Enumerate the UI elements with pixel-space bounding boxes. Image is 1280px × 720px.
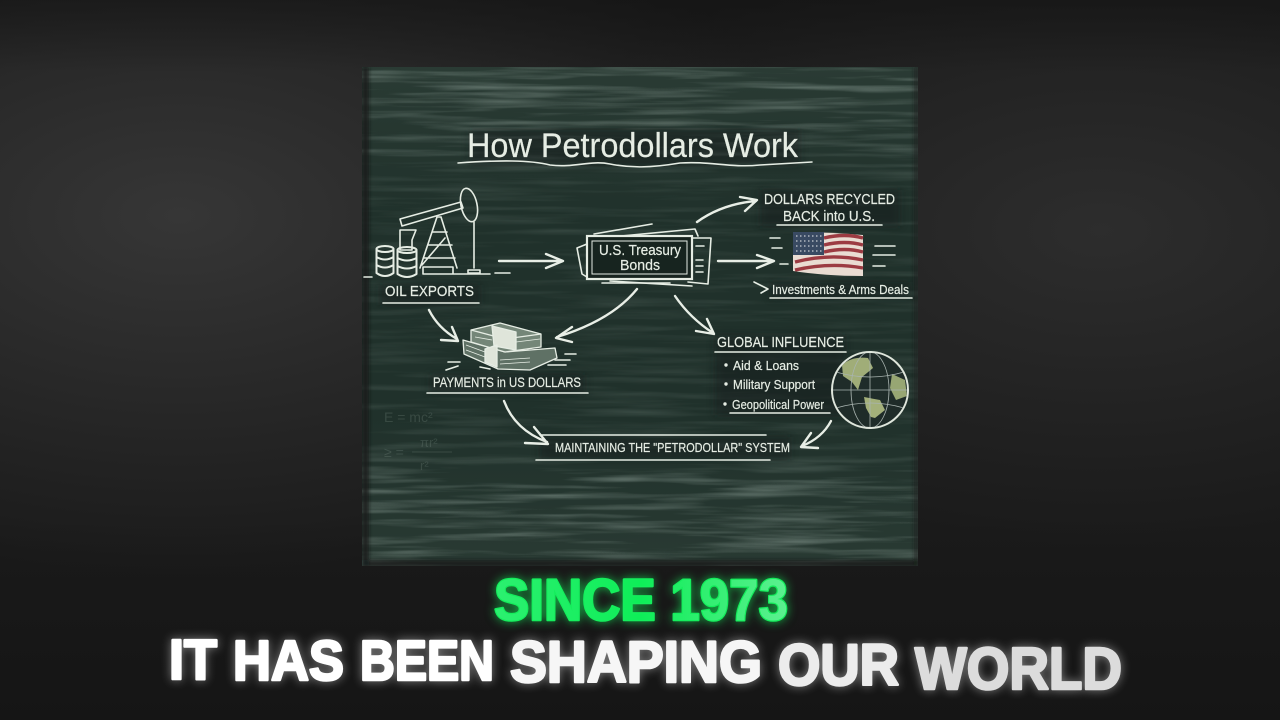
arrow: bonds to flag [718, 255, 774, 268]
faint chalk formulas: πr² [420, 435, 438, 450]
caption: it has been shaping our world: HAS [233, 629, 344, 693]
label: maintaining the petrodollar system: MAINTAINING THE "PETRODOLLAR" SYSTEM [555, 440, 790, 455]
title: How Petrodollars Work [467, 127, 799, 165]
icon: dollar bundles [446, 323, 576, 370]
label: oil exports: OIL EXPORTS [385, 284, 474, 300]
caption: it has been shaping our world: WORLD [915, 636, 1122, 702]
global influence list: Aid & Loans [733, 358, 799, 373]
arrow: oil to bonds [499, 254, 563, 268]
label: dollars recycled: DOLLARS RECYCLED [764, 191, 895, 208]
icon: treasury bonds [577, 224, 711, 286]
arrow: bonds to payments [556, 289, 637, 342]
global influence list: Military Support [733, 377, 815, 392]
icon: american flag [770, 232, 895, 276]
arrow: bonds to recycled dollars [697, 197, 757, 222]
faint chalk formulas: ≥ = [384, 444, 404, 460]
caption: it has been shaping our world: IT [169, 628, 217, 692]
caption: since 1973: SINCE 1973 [494, 568, 788, 633]
faint chalk formulas [384, 409, 452, 473]
arrow: globe to system [801, 421, 831, 448]
label: dollars recycled: BACK into U.S. [783, 208, 875, 225]
global influence list: Geopolitical Power [732, 397, 825, 412]
caption: it has been shaping our world [169, 628, 1122, 702]
chalkboard panel [362, 67, 919, 567]
label: investments and arms deals: Investments & Arms Deals [772, 282, 909, 297]
icon: oil pump jack and barrels [364, 187, 510, 277]
arrow: oil to payments [429, 310, 458, 341]
label: payments in us dollars: PAYMENTS in US DOLLARS [433, 375, 581, 390]
faint chalk formulas: E = mc² [384, 409, 433, 425]
faint chalk formulas: r² [420, 458, 429, 473]
icon: treasury bonds: Bonds [620, 258, 660, 274]
caption: it has been shaping our world: OUR [778, 633, 899, 698]
label: dollars recycled [764, 191, 895, 225]
caption: it has been shaping our world: SHAPING [510, 630, 762, 695]
arrow: payments to system [504, 401, 548, 444]
caption: it has been shaping our world: BEEN [360, 629, 494, 693]
icon: treasury bonds: U.S. Treasury [599, 243, 682, 259]
global influence list [715, 334, 846, 413]
global influence list: GLOBAL INFLUENCE [717, 334, 844, 351]
icon: globe [832, 352, 908, 428]
arrow: bonds to global influence [675, 296, 714, 334]
